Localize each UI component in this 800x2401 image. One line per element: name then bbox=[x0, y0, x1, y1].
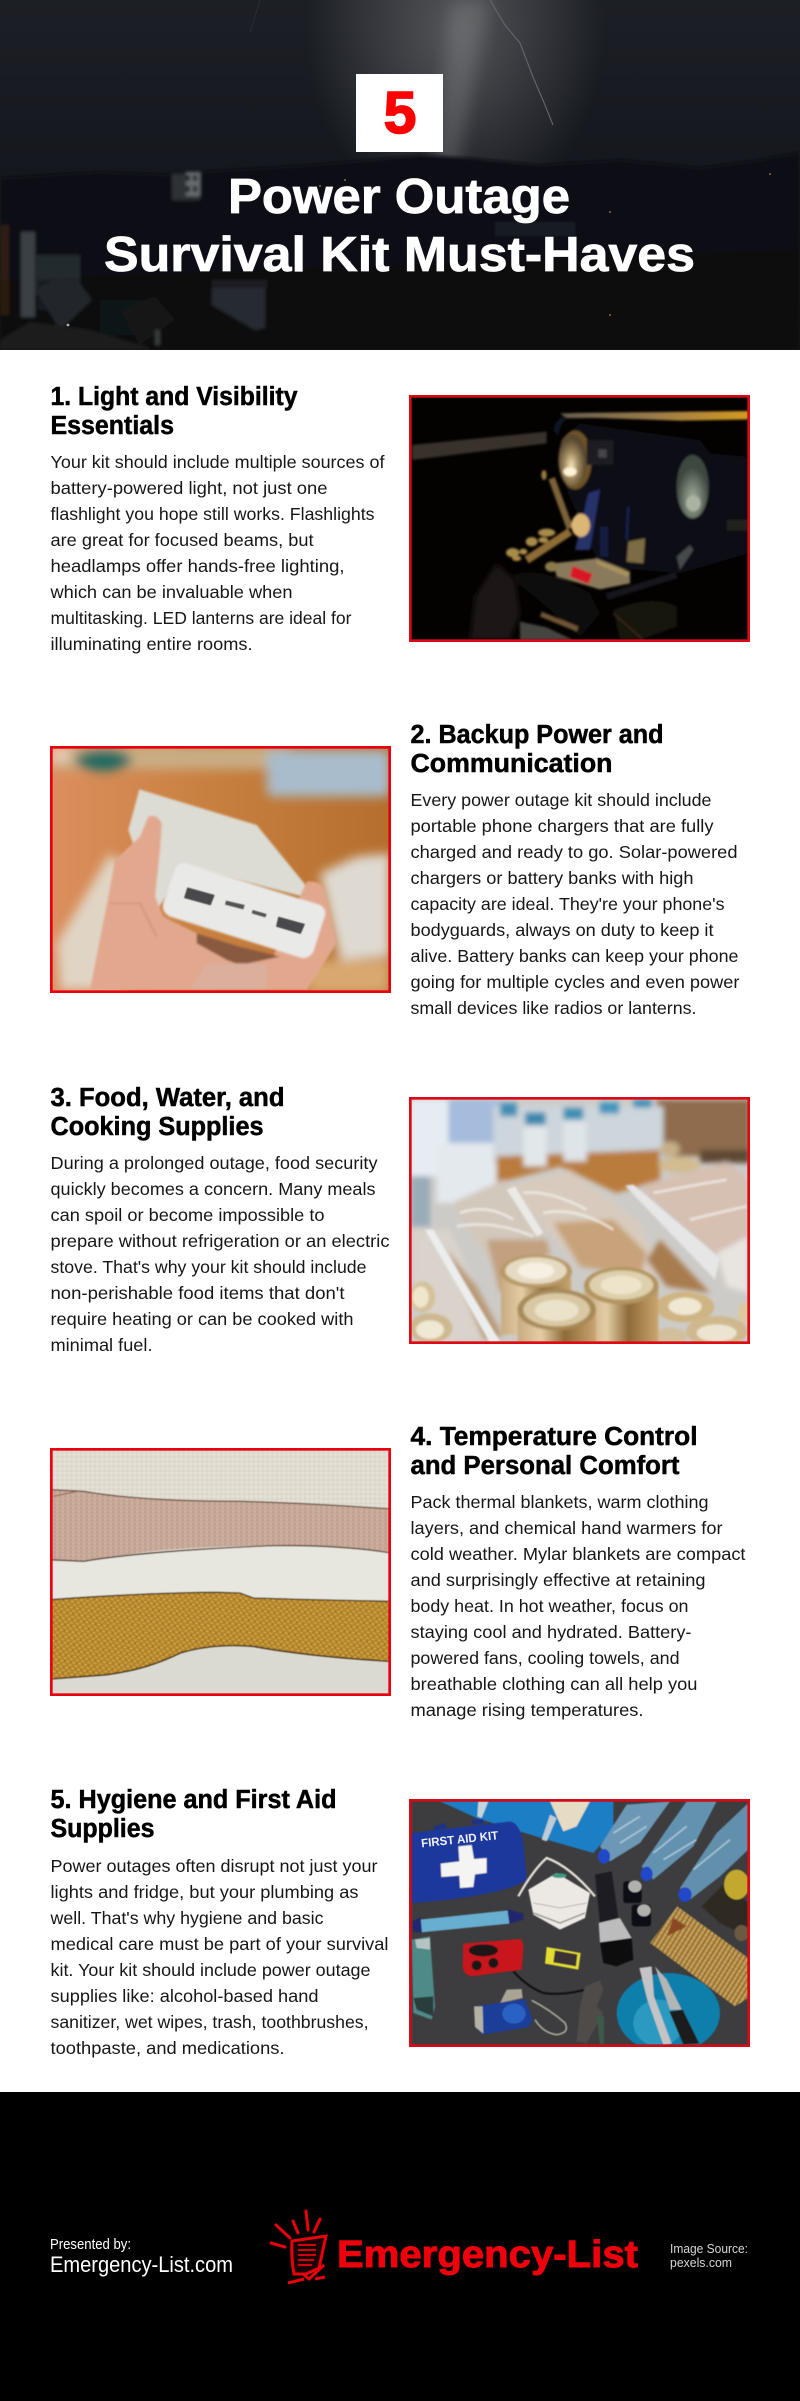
body text 3: minimal fuel. bbox=[50, 1335, 152, 1355]
body text 4: Pack thermal blankets, warm clothing bbox=[410, 1492, 708, 1512]
heading 3 bbox=[50, 1084, 284, 1141]
heading 5: 5. Hygiene and First Aid bbox=[50, 1786, 336, 1814]
body text 1: Your kit should include multiple sources of bbox=[50, 452, 385, 472]
body text 1: illuminating entire rooms. bbox=[50, 634, 253, 654]
body text 2: chargers or battery banks with high bbox=[410, 868, 694, 888]
body text 2: capacity are ideal. They're your phone's bbox=[410, 894, 725, 914]
section 5: hygiene and first aid bbox=[49, 1786, 750, 2058]
image source: pexels.com bbox=[670, 2255, 732, 2270]
body text 3: quickly becomes a concern. Many meals bbox=[50, 1179, 376, 1199]
body text 4: layers, and chemical hand warmers for bbox=[410, 1518, 723, 1538]
body text 1: headlamps offer hands-free lighting, bbox=[50, 556, 344, 576]
body text 4: powered fans, cooling towels, and bbox=[410, 1648, 680, 1668]
body text 4: and surprisingly effective at retaining bbox=[410, 1570, 706, 1590]
photo: first aid kit and emergency supplies bbox=[409, 1799, 750, 2047]
body text 5: Power outages often disrupt not just your bbox=[50, 1856, 378, 1876]
heading 2 bbox=[410, 721, 664, 778]
photo: first aid kit and emergency supplies: FIRST AID KIT bbox=[421, 1828, 500, 1850]
body text 3 bbox=[50, 1153, 390, 1355]
body text 5: lights and fridge, but your plumbing as bbox=[50, 1882, 359, 1902]
body text 2 bbox=[410, 790, 740, 1018]
body text 1: multitasking. LED lanterns are ideal for bbox=[50, 608, 352, 628]
body text 2: charged and ready to go. Solar-powered bbox=[410, 842, 738, 862]
body text 5: well. That's why hygiene and basic bbox=[49, 1908, 324, 1928]
body text 2: going for multiple cycles and even power bbox=[410, 972, 740, 992]
section 1: light and visibility bbox=[49, 383, 750, 654]
image source bbox=[670, 2241, 748, 2270]
body text 1 bbox=[49, 452, 385, 654]
body text 2: portable phone chargers that are fully bbox=[410, 816, 714, 836]
photo: jeep with headlights at night bbox=[409, 395, 750, 642]
heading 1 bbox=[50, 383, 298, 440]
body text 2: Every power outage kit should include bbox=[410, 790, 712, 810]
heading 4: 4. Temperature Control bbox=[410, 1423, 698, 1451]
body text 4: cold weather. Mylar blankets are compact bbox=[410, 1544, 746, 1564]
body text 3: can spoil or become impossible to bbox=[50, 1205, 324, 1225]
section 2: backup power and communication bbox=[50, 721, 740, 1018]
section 3: food, water and cooking supplies bbox=[50, 1084, 752, 1355]
body text 4: staying cool and hydrated. Battery- bbox=[410, 1622, 692, 1642]
presented by: Emergency-List.com bbox=[50, 2252, 233, 2277]
heading 3: 3. Food, Water, and bbox=[50, 1084, 284, 1112]
body text 3: During a prolonged outage, food security bbox=[50, 1153, 378, 1173]
body text 4: breathable clothing can all help you bbox=[410, 1674, 698, 1694]
heading 5: Supplies bbox=[50, 1815, 154, 1843]
body text 4 bbox=[410, 1492, 746, 1720]
presented by bbox=[50, 2236, 233, 2277]
logo wordmark: Emergency-List bbox=[337, 2234, 638, 2276]
body text 1: which can be invaluable when bbox=[49, 582, 293, 602]
heading 2: Communication bbox=[410, 750, 612, 778]
number badge: 5 bbox=[384, 80, 416, 146]
body text 5: kit. Your kit should include power outage bbox=[50, 1960, 370, 1980]
header photo: lightning over town at night bbox=[0, 0, 800, 350]
header banner bbox=[0, 0, 800, 350]
heading 3: Cooking Supplies bbox=[50, 1113, 264, 1141]
heading 4: and Personal Comfort bbox=[410, 1452, 680, 1480]
photo: hand holding power bank bbox=[50, 746, 391, 993]
number badge bbox=[356, 74, 443, 152]
body text 5 bbox=[49, 1856, 389, 2058]
heading 2: 2. Backup Power and bbox=[410, 721, 664, 749]
body text 2: small devices like radios or lanterns. bbox=[410, 998, 696, 1018]
body text 5: sanitizer, wet wipes, trash, toothbrushes, bbox=[50, 2012, 368, 2032]
photo: water bottles, bagged food and cans bbox=[409, 1097, 750, 1344]
heading 5 bbox=[50, 1786, 336, 1843]
body text 4: body heat. In hot weather, focus on bbox=[410, 1596, 688, 1616]
title: Power Outage bbox=[228, 170, 570, 224]
body text 1: flashlight you hope still works. Flashlights bbox=[50, 504, 375, 524]
body text 3: require heating or can be cooked with bbox=[50, 1309, 354, 1329]
logo bbox=[271, 2211, 638, 2283]
body text 2: bodyguards, always on duty to keep it bbox=[410, 920, 714, 940]
body text 4: manage rising temperatures. bbox=[410, 1700, 644, 1720]
heading 1: 1. Light and Visibility bbox=[50, 383, 298, 411]
section 4: temperature control bbox=[50, 1423, 746, 1720]
logo icon: checklist with rays bbox=[271, 2211, 326, 2283]
photo: stack of folded blankets bbox=[50, 1448, 391, 1696]
heading 4 bbox=[410, 1423, 698, 1480]
title: Survival Kit Must-Haves bbox=[104, 228, 695, 282]
image source: Image Source: bbox=[670, 2241, 748, 2256]
body text 1: battery-powered light, not just one bbox=[50, 478, 328, 498]
body text 5: medical care must be part of your survival bbox=[50, 1934, 388, 1954]
presented by: Presented by: bbox=[50, 2236, 131, 2253]
body text 5: toothpaste, and medications. bbox=[50, 2038, 284, 2058]
body text 2: alive. Battery banks can keep your phone bbox=[410, 946, 738, 966]
title bbox=[104, 170, 695, 282]
body text 3: non-perishable food items that don't bbox=[50, 1283, 345, 1303]
body text 3: prepare without refrigeration or an electric bbox=[50, 1231, 390, 1251]
body text 3: stove. That's why your kit should include bbox=[50, 1257, 366, 1277]
body text 5: supplies like: alcohol-based hand bbox=[50, 1986, 318, 2006]
footer bbox=[0, 2092, 800, 2401]
heading 1: Essentials bbox=[50, 412, 174, 440]
body text 1: are great for focused beams, but bbox=[50, 530, 314, 550]
